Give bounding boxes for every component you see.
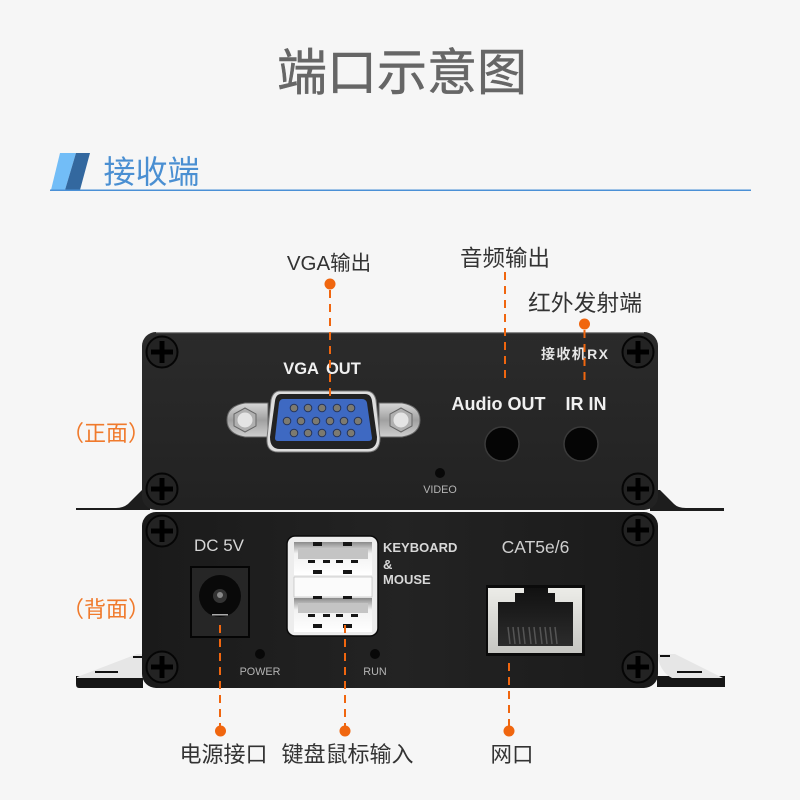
connector: DC power jack — [191, 567, 249, 637]
callout: keyboard and mouse input: 键盘鼠标输入 — [281, 742, 414, 767]
screws: back panel — [146, 514, 654, 682]
callout: network port — [490, 663, 534, 767]
connector: RJ45 network port — [486, 585, 585, 656]
label: keyboard and mouse: MOUSE — [383, 572, 431, 587]
callout: IR transmitter — [528, 290, 642, 384]
mounting brackets: front panel — [76, 490, 724, 511]
icon: parallelogram tab — [51, 153, 90, 190]
section title text: 接收端 — [104, 154, 200, 190]
label: CAT5e/6: CAT5e/6 — [502, 537, 569, 557]
label: POWER: POWER — [240, 666, 281, 678]
callout: power port: 电源接口 — [179, 742, 268, 767]
screws: front panel — [146, 336, 654, 504]
side label: back: （背面） — [62, 597, 150, 622]
connector: VGA port — [227, 391, 420, 452]
label: DC 5V: DC 5V — [194, 536, 245, 555]
label: keyboard and mouse — [383, 540, 457, 587]
callout: VGA output — [287, 252, 371, 399]
label: VGA OUT: VGA OUT — [283, 360, 361, 378]
panel: front of receiver — [142, 332, 658, 510]
label: keyboard and mouse: & — [383, 557, 392, 572]
mounting brackets: back panel — [76, 654, 725, 688]
callout: IR transmitter: 红外发射端 — [528, 290, 642, 316]
label: IR IN: IR IN — [565, 394, 607, 414]
callout: audio output — [460, 246, 550, 383]
callout: network port: 网口 — [490, 743, 534, 767]
LED: run — [370, 649, 380, 659]
label: keyboard and mouse: KEYBOARD — [383, 540, 457, 555]
panel: back of receiver — [142, 512, 658, 688]
title: 端口示意图 — [277, 45, 527, 101]
callout: keyboard and mouse input — [281, 625, 414, 767]
callout: VGA output: VGA输出 — [287, 252, 371, 275]
side label: front: （正面） — [62, 421, 150, 446]
jack: audio out — [485, 427, 519, 461]
label: receiver RX: 接收机RX — [541, 346, 609, 362]
label: RUN: RUN — [363, 666, 387, 678]
connector: dual USB port — [287, 536, 378, 636]
label: VIDEO: VIDEO — [423, 484, 457, 496]
section underline — [50, 190, 751, 191]
jack: IR in — [564, 427, 598, 461]
section heading: receiver — [50, 153, 751, 191]
callout: audio output: 音频输出 — [460, 246, 550, 271]
callout: power port — [179, 625, 268, 767]
label: Audio OUT: Audio OUT — [452, 394, 545, 414]
LED: power — [255, 649, 265, 659]
LED: video — [435, 468, 445, 478]
